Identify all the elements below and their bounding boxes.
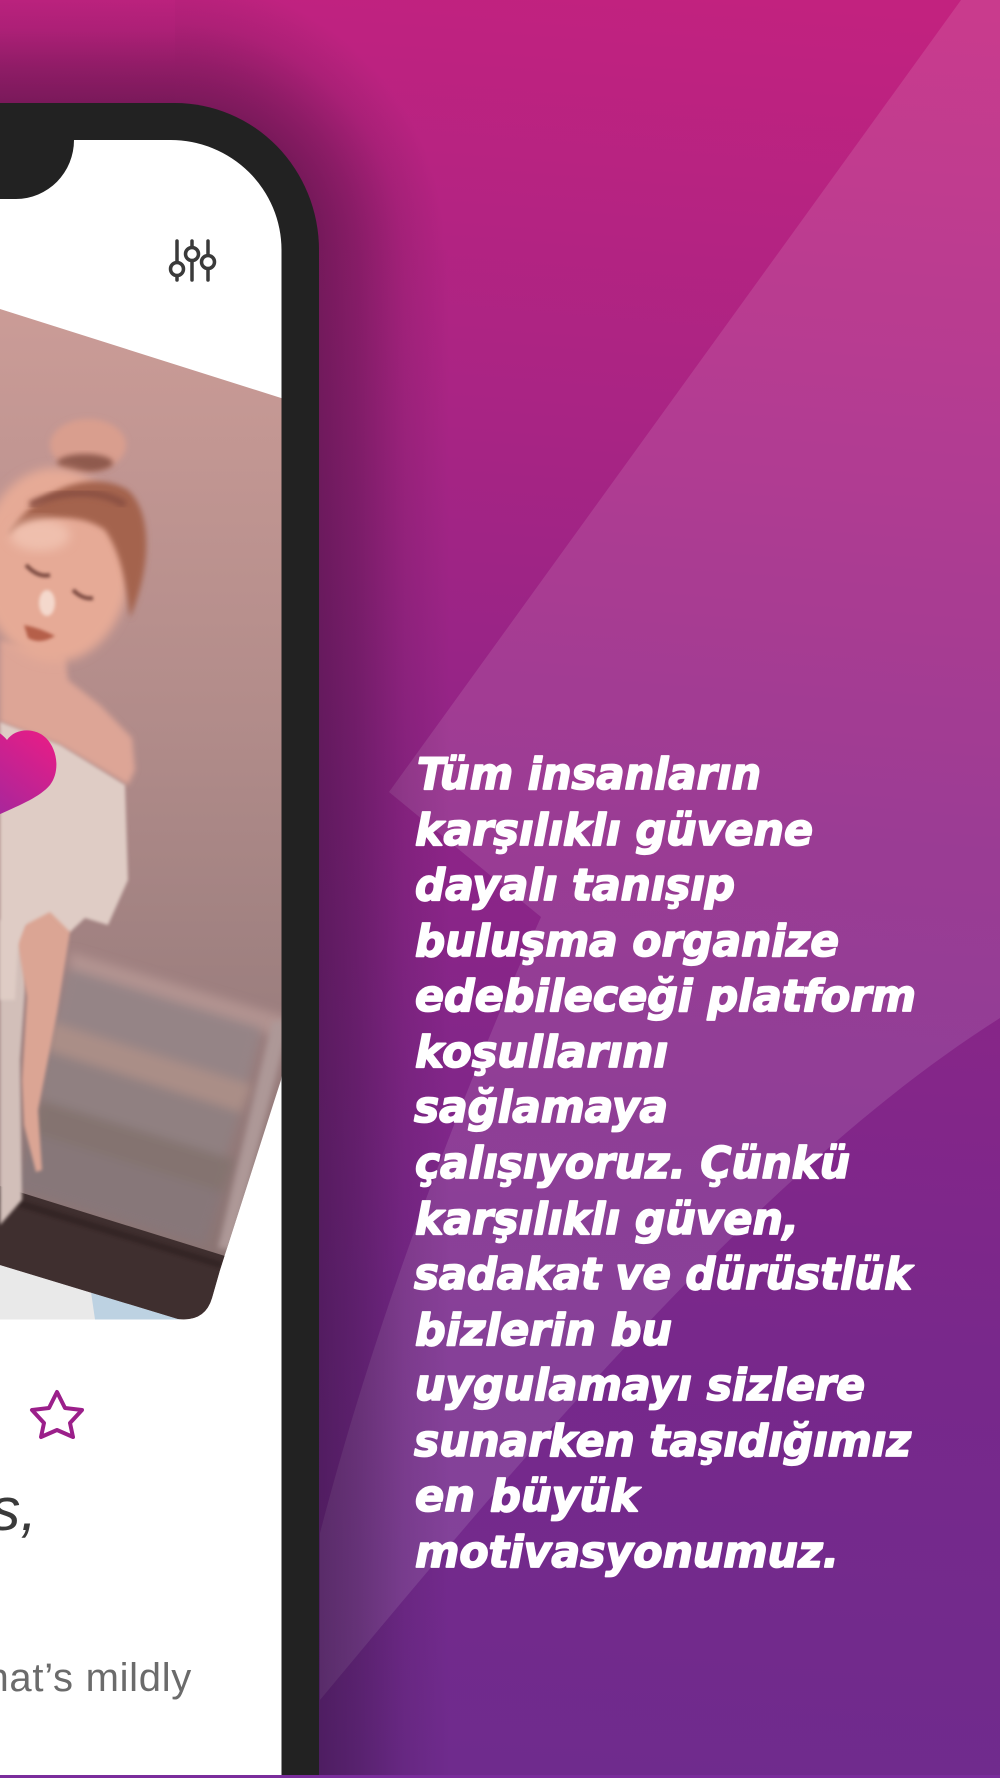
- face details: [24, 565, 93, 641]
- main statement text: sunarken taşıdığımız: [414, 1416, 911, 1467]
- forehead highlight: [10, 519, 70, 551]
- lower photo behind card: [0, 1265, 180, 1320]
- main statement text: en büyük: [415, 1471, 642, 1522]
- main statement text: Tüm insanların: [417, 749, 761, 800]
- main statement text: edebileceği platform: [415, 971, 916, 1022]
- stairs: [24, 954, 282, 1195]
- phone screen: [0, 130, 300, 1775]
- arm: [18, 911, 72, 1174]
- icon: filter sliders: [170, 241, 214, 280]
- dress lower: [0, 920, 26, 1226]
- main statement text: bizlerin bu: [415, 1305, 672, 1356]
- bottom purple strip: [0, 1775, 1000, 1778]
- main statement text: karşılıklı güven,: [415, 1194, 799, 1245]
- phone: [0, 103, 319, 1775]
- main statement text: [414, 749, 916, 1578]
- bun: [50, 419, 126, 471]
- main statement text: karşılıklı güvene: [415, 805, 813, 856]
- main statement text: çalışıyoruz. Çünkü: [415, 1138, 850, 1189]
- icon: heart: [0, 726, 56, 815]
- head: [0, 468, 130, 662]
- main statement text: buluşma organize: [415, 916, 839, 967]
- light translucent polygon: [320, 0, 1000, 1700]
- phone shadow: [0, 0, 450, 1775]
- main statement text: koşullarını: [415, 1027, 668, 1078]
- main statement text: sadakat ve dürüstlük: [414, 1249, 915, 1300]
- hair: [8, 481, 146, 618]
- phone frame: [0, 103, 319, 1775]
- stair rail: [217, 1028, 282, 1251]
- main statement text: dayalı tanışıp: [415, 860, 735, 911]
- dark stair base: [0, 1186, 224, 1320]
- shoulder and neck: [0, 640, 135, 785]
- main statement text: sağlamaya: [414, 1082, 668, 1133]
- main statement text: motivasyonumuz.: [415, 1527, 839, 1578]
- woman: [0, 419, 146, 1225]
- photo card: [0, 300, 300, 1335]
- icon: star: [32, 1392, 82, 1437]
- dress top: [0, 722, 128, 1000]
- main statement text: uygulamayı sizlere: [415, 1360, 865, 1411]
